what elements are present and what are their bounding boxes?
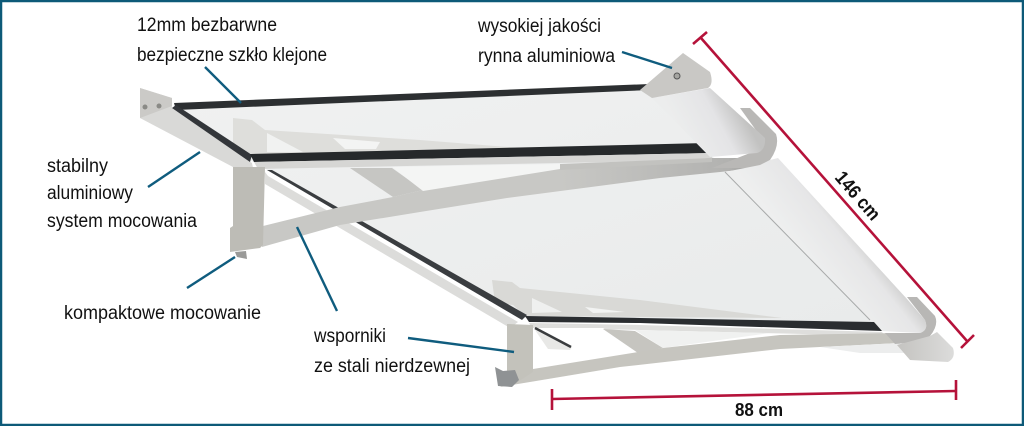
lower bracket strut: [603, 329, 663, 353]
top strut of the front bracket: [350, 168, 423, 197]
lower bracket pale behind part: [535, 330, 572, 350]
lower bracket post: [507, 324, 533, 387]
lower bracket cut-out: [635, 330, 770, 348]
left dark glass edge: [172, 105, 252, 162]
label: glass: bezpieczne szkło klejone: [137, 45, 327, 66]
leader line: gutter: [622, 52, 672, 68]
label: mounting system: system mocowania: [47, 211, 197, 232]
dimension: 146 cm: [693, 32, 974, 348]
front dark glass edge: [525, 316, 882, 331]
vertical post of the front bracket: [230, 167, 265, 252]
rear dark glass edge: [174, 84, 650, 110]
label: gutter: rynna aluminiowa: [478, 46, 615, 67]
leader line: compact fixing: [187, 257, 235, 288]
glass canopy: [175, 90, 872, 322]
lower bracket front arm: [500, 333, 900, 387]
label: stainless brackets: ze stali nierdzewnej: [314, 356, 470, 377]
see-through lower bracket: [492, 280, 782, 318]
side plate lower: [885, 297, 936, 344]
cut-out of the front bracket: [392, 164, 560, 191]
aluminium gutter lower part: [725, 158, 926, 333]
label: gutter: [477, 16, 615, 67]
label: gutter: wysokiej jakości: [477, 16, 601, 37]
label: glass: [137, 15, 327, 66]
leader line: mounting system: [148, 152, 200, 187]
leader line: stainless brackets: [297, 227, 337, 311]
compact fixing: [235, 251, 247, 259]
leader line: glass: [205, 67, 241, 103]
awning product illustration: [140, 53, 954, 387]
arm of the front bracket: [262, 158, 767, 247]
label: mounting system: [47, 156, 197, 232]
label: stainless brackets: [313, 326, 470, 377]
label: mounting system: stabilny: [47, 156, 108, 177]
front support bar: [250, 143, 712, 162]
dimension: 88 cm: [552, 380, 956, 410]
label: 146 cm: 146 cm: [830, 168, 884, 225]
left aluminium mounting rail: [140, 88, 253, 168]
see-through upper bracket: [233, 118, 520, 155]
gutter end cap lower: [897, 332, 954, 362]
label: 88 cm: 88 cm: [735, 400, 783, 420]
leader line: lower bracket: [408, 338, 514, 352]
lower bracket fixing: [495, 367, 519, 387]
cap screw: [674, 73, 680, 79]
mounting screws: [142, 104, 148, 110]
lower pale strip: [820, 343, 905, 353]
aluminium gutter upper part: [652, 88, 765, 157]
side plate near front bar: [712, 108, 777, 168]
gutter end cap rear: [640, 53, 712, 98]
label: glass: 12mm bezbarwne: [137, 15, 277, 36]
label: stainless brackets: wsporniki: [313, 326, 386, 347]
front silver strip: [529, 323, 885, 336]
label: mounting system: aluminiowy: [47, 183, 133, 204]
label: compact fixing: kompaktowe mocowanie: [64, 303, 261, 324]
lower bracket white cut-out: [533, 328, 638, 369]
